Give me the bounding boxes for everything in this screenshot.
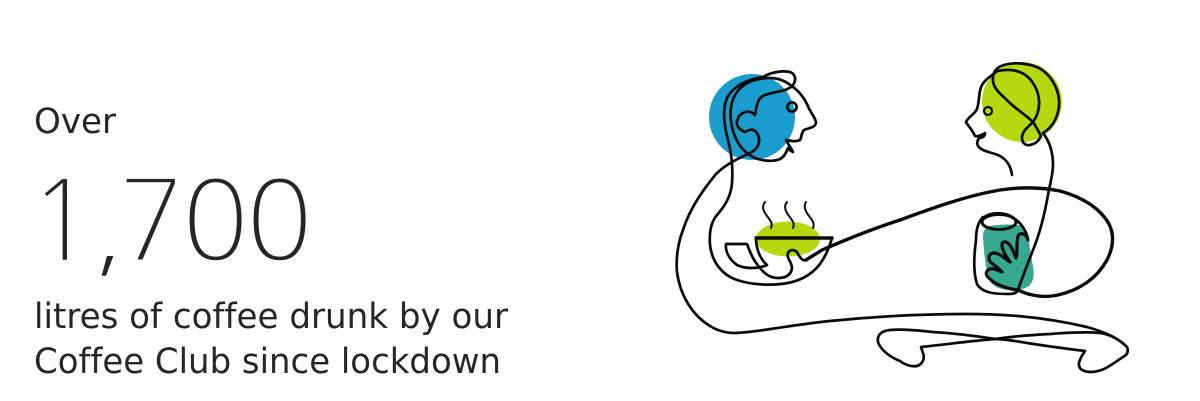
- steam 3: [805, 202, 814, 228]
- big number: 1,700: ,: [91, 165, 125, 278]
- jar body: [974, 213, 1028, 294]
- big number: 1,700: 0: [245, 165, 313, 278]
- description line 1: litres of coffee drunk by our: [34, 297, 509, 337]
- face and hair: [966, 63, 1059, 290]
- teal patch in jar: [983, 224, 1034, 290]
- label: Over: Over: [34, 102, 117, 142]
- big number: 1,700: 0: [181, 165, 249, 278]
- big number: 1,700: 7: [117, 165, 185, 278]
- long flowing base line: [677, 230, 1128, 372]
- hand fingers: [986, 234, 1028, 290]
- green circle behind right head: [982, 62, 1062, 142]
- big number: 1,700: 1: [27, 165, 95, 278]
- blue circle behind left head: [709, 74, 795, 160]
- eye: [984, 107, 992, 115]
- head outline and ear: [683, 71, 832, 285]
- text block: statistic: [27, 102, 509, 382]
- green ellipse in bowl: [756, 222, 820, 256]
- jar with hand: [974, 213, 1028, 294]
- steam 1: [763, 202, 772, 228]
- right person head line: [966, 63, 1059, 290]
- left person head and arm line: [683, 71, 832, 285]
- eye: [787, 102, 797, 112]
- bowl rim: [756, 236, 832, 240]
- steam lines: [763, 202, 814, 228]
- description line 2: Coffee Club since lockdown: [34, 342, 501, 382]
- wide arm connecting bowl to right person: [806, 188, 1113, 296]
- jar lid: [982, 214, 1016, 230]
- holding hand under bowl: [726, 238, 806, 278]
- steam 2: [785, 202, 794, 228]
- face profile: [731, 78, 816, 161]
- illustration: two people sharing coffee: [677, 62, 1128, 372]
